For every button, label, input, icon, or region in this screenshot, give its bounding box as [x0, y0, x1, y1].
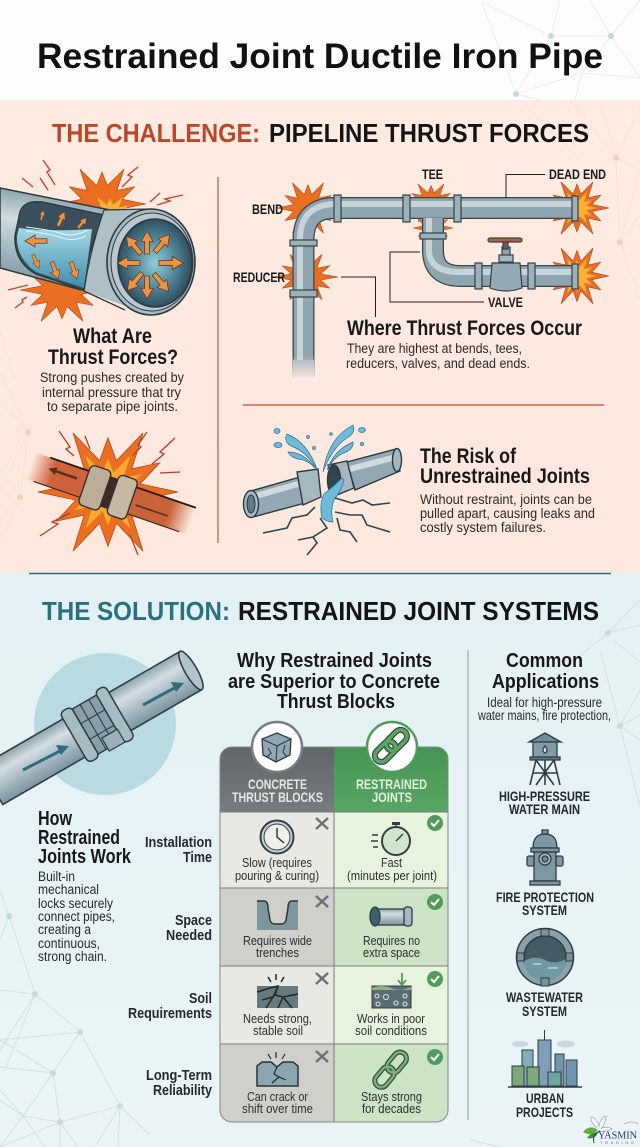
row: installation time: (minutes per joint) [347, 869, 437, 883]
text: where thrust forces occur: reducers, valves, and dead ends. [346, 356, 530, 371]
text: what are thrust forces: What Are [73, 325, 152, 348]
left pipe piece [244, 469, 321, 518]
part labels: VALVE [488, 294, 523, 310]
row: long-term reliability: Long-Term [146, 1068, 212, 1084]
text: how restrained joints work: locks securely [38, 896, 113, 911]
row: long-term reliability: for decades [362, 1102, 421, 1116]
heading: the solution [42, 596, 599, 626]
icon: compact pipe [370, 907, 412, 926]
column heading: restrained joints [356, 776, 427, 805]
icon: broken pipe with leaking water [244, 425, 402, 555]
text: how restrained joints work: Joints Work [38, 846, 132, 868]
application: water tower [499, 733, 590, 817]
heading: why restrained joints are superior [228, 650, 440, 713]
part labels [233, 166, 606, 310]
row: soil requirements: soil conditions [355, 1024, 427, 1038]
row: soil requirements: Works in poor [357, 1012, 425, 1026]
row: long-term reliability: Stays strong [361, 1090, 422, 1104]
column heading: concrete thrust blocks: CONCRETE [248, 776, 307, 792]
icon: chain [367, 722, 417, 772]
row: space needed: trenches [256, 946, 299, 960]
row: soil requirements: Soil [189, 991, 212, 1007]
table cells [220, 747, 448, 1122]
heading: common applications [477, 650, 611, 723]
text: what are thrust forces: Strong pushes created by [40, 370, 184, 385]
page background: title band [0, 0, 640, 100]
row: long-term reliability: Reliability [153, 1083, 212, 1099]
row: space needed: Needed [166, 928, 212, 944]
text: what are thrust forces [40, 325, 184, 414]
heading: common applications: Applications [492, 671, 599, 693]
row: long-term reliability: Can crack or [247, 1090, 308, 1104]
text: how restrained joints work: strong chain. [38, 949, 107, 964]
right pipe piece [328, 448, 402, 495]
text: how restrained joints work: connect pipes, [38, 909, 115, 924]
row: installation time: pouring & curing) [235, 869, 319, 883]
row: installation time: Installation [145, 835, 212, 851]
application: wastewater pipe: SYSTEM [522, 1003, 567, 1019]
logo: yasmin: YASMIN [598, 1130, 637, 1142]
text: risk of unrestrained joints: costly system failures. [420, 520, 546, 535]
part labels: REDUCER [233, 269, 285, 285]
column heading: concrete thrust blocks [232, 776, 323, 805]
application: fire hydrant [496, 830, 594, 918]
icon: stopwatch [371, 822, 410, 855]
row: space needed: Requires no [363, 934, 420, 948]
icon: separating joint explosion [24, 431, 198, 555]
icon: restrained joint pipe [0, 642, 211, 811]
logo: yasmin [583, 1116, 638, 1145]
heading: the challenge: THE CHALLENGE: [52, 118, 260, 148]
text: risk of unrestrained joints: pulled apart, causing leaks and [420, 506, 595, 521]
text: where thrust forces occur [346, 317, 582, 371]
row: soil requirements [128, 971, 443, 1038]
section divider [29, 572, 611, 574]
text: how restrained joints work: creating a [38, 922, 91, 937]
heading: common applications: Ideal for high-pressure [487, 695, 602, 710]
application: fire hydrant: FIRE PROTECTION [496, 889, 594, 905]
logo: yasmin: TRADING [600, 1140, 634, 1145]
valve [488, 238, 522, 291]
text: how restrained joints work: continuous, [38, 936, 100, 951]
comparison table [128, 722, 448, 1122]
heading: the solution: THE SOLUTION: [42, 596, 230, 626]
column divider [467, 650, 469, 1120]
text: where thrust forces occur: Where Thrust Forces Occur [347, 317, 582, 340]
application: city skyline: PROJECTS [516, 1104, 573, 1120]
text: what are thrust forces: internal pressure that try [42, 385, 181, 400]
text: risk of unrestrained joints: The Risk of [420, 445, 517, 468]
row: space needed: extra space [363, 946, 420, 960]
icon: cracked block [257, 1052, 298, 1086]
icon: wide trench [257, 901, 298, 930]
page background: challenge panel [0, 100, 640, 573]
heading: the challenge: PIPELINE THRUST FORCES [269, 118, 589, 148]
text: what are thrust forces: Thrust Forces? [48, 346, 178, 369]
ground cracks [263, 498, 390, 555]
diagram: where thrust forces occur [233, 166, 609, 382]
heading: why restrained joints are superior: Why Restrained Joints [237, 650, 432, 672]
heading: the challenge [52, 118, 589, 148]
heading: common applications: Common [506, 650, 583, 672]
row: soil requirements: Needs strong, [243, 1012, 312, 1026]
icon: concrete block [252, 722, 302, 772]
icon: clock [260, 820, 294, 854]
row: soil requirements: stable soil [253, 1024, 303, 1038]
row: space needed [166, 894, 443, 960]
row: space needed: Requires wide [243, 934, 312, 948]
row: installation time: Slow (requires [242, 856, 312, 870]
heading: the solution: RESTRAINED JOINT SYSTEMS [238, 596, 599, 626]
horizontal divider [243, 404, 604, 406]
part labels: DEAD END [549, 166, 606, 182]
application: wastewater pipe: WASTEWATER [506, 989, 583, 1005]
heading: common applications: water mains, fire protection, [477, 708, 611, 723]
text: risk of unrestrained joints: Without restraint, joints can be [420, 492, 592, 507]
row: space needed: Space [175, 913, 212, 929]
application: wastewater pipe [506, 928, 583, 1019]
vertical divider [217, 177, 219, 543]
part labels: BEND [252, 201, 283, 217]
row: installation time: Time [183, 850, 212, 866]
part labels: TEE [422, 166, 443, 182]
text: how restrained joints work: Built-in [38, 869, 75, 884]
icon: cracked soil [257, 974, 298, 1008]
application: city skyline [508, 1030, 582, 1120]
text: where thrust forces occur: They are highest at bends, tees, [347, 341, 522, 356]
text: how restrained joints work: mechanical [38, 882, 99, 897]
icon: strong chain [372, 1049, 409, 1090]
page background: solution panel [0, 573, 640, 1147]
text: risk of unrestrained joints: Unrestrained Joints [420, 465, 590, 488]
text: how restrained joints work [38, 808, 132, 964]
heading: why restrained joints are superior: are Superior to Concrete [228, 671, 440, 693]
icon: poor soil [372, 973, 411, 1008]
leader lines [341, 174, 545, 317]
application: water tower: WATER MAIN [509, 801, 580, 817]
row: installation time [145, 815, 443, 883]
title: Restrained Joint Ductile Iron Pipe [37, 37, 603, 76]
heading: why restrained joints are superior: Thrust Blocks [277, 691, 395, 713]
row: installation time: Fast [381, 856, 402, 870]
row: soil requirements: Requirements [128, 1006, 212, 1022]
text: risk of unrestrained joints [420, 445, 595, 535]
application: fire hydrant: SYSTEM [522, 902, 567, 918]
column heading: restrained joints: RESTRAINED [356, 776, 427, 792]
row: long-term reliability [146, 1049, 443, 1116]
text: how restrained joints work: How [38, 808, 72, 830]
icon: pipe cross-section with internal pressure [0, 160, 195, 321]
column heading: restrained joints: JOINTS [372, 789, 412, 805]
row: long-term reliability: shift over time [242, 1102, 313, 1116]
text: how restrained joints work: Restrained [38, 827, 120, 849]
column heading: concrete thrust blocks: THRUST BLOCKS [232, 789, 323, 805]
application: city skyline: URBAN [526, 1090, 564, 1106]
water jets [274, 425, 366, 522]
application: water tower: HIGH-PRESSURE [499, 788, 590, 804]
text: what are thrust forces: to separate pipe joints. [47, 399, 178, 414]
